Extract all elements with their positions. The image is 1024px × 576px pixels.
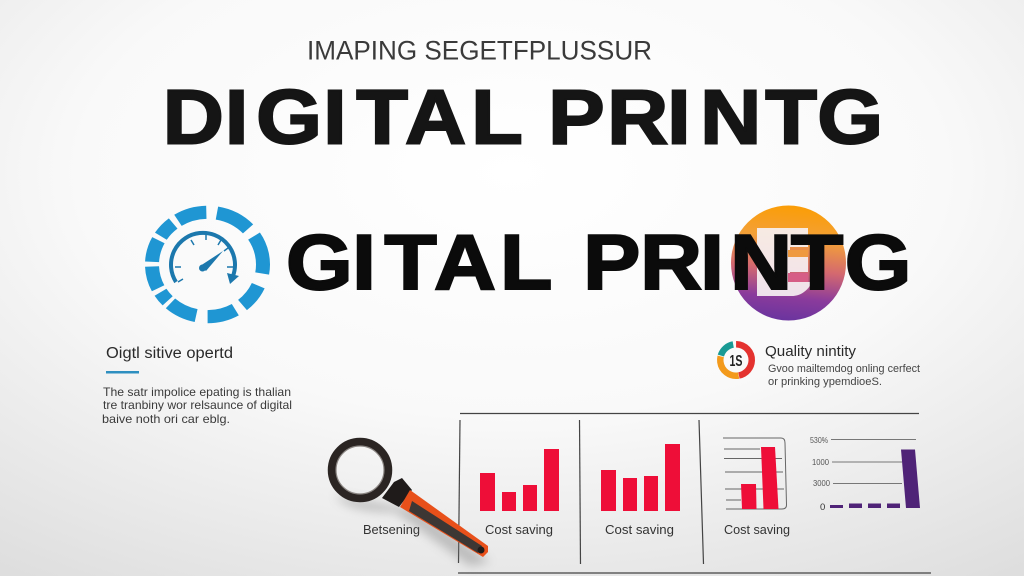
chart frame [458,414,931,573]
label: Cost saving [724,522,790,537]
bar chart 4: 3000 [813,479,831,488]
icon: gradient logo circle [731,206,846,320]
heading: quality: Quality nintity [765,344,857,360]
secondary title: GITAL PRINTG [286,220,912,306]
body text: Gvoo mailtemdog onling cerfect [768,363,920,375]
icon: speedometer gauge [143,204,272,325]
text block: digital sensitive [102,345,292,426]
body text: The satr impolice epating is thalian [103,385,291,399]
bar chart 4: 1000 [812,458,830,467]
bar chart 3 [723,438,790,537]
bar chart 2 [601,444,680,537]
accent line [106,371,139,374]
icon: quality donut: 1S [730,353,743,370]
label: Cost saving [485,522,553,537]
icon: magnifying glass [332,442,490,566]
bar chart 1 [480,449,559,537]
label: Cost saving [605,522,674,537]
label: magnifier caption: Betsening [363,522,420,537]
bar chart 4: 530% [810,436,828,445]
quality callout [716,340,920,388]
heading: digital sensitive: Oigtl sitive opertd [106,345,233,362]
bar chart 4 [810,436,920,513]
icon: quality donut [716,340,756,380]
body text: baive noth ori car eblg. [102,412,230,426]
body text: or prinking ypemdioeS. [768,376,882,388]
subtitle: IMAPING SEGETFPLUSSUR [307,36,652,66]
body text: tre tranbiny wor relsaunce of digital [103,398,292,412]
main title: DIGITAL PRINTG [163,75,883,161]
bar chart 4: 0 [820,502,825,513]
